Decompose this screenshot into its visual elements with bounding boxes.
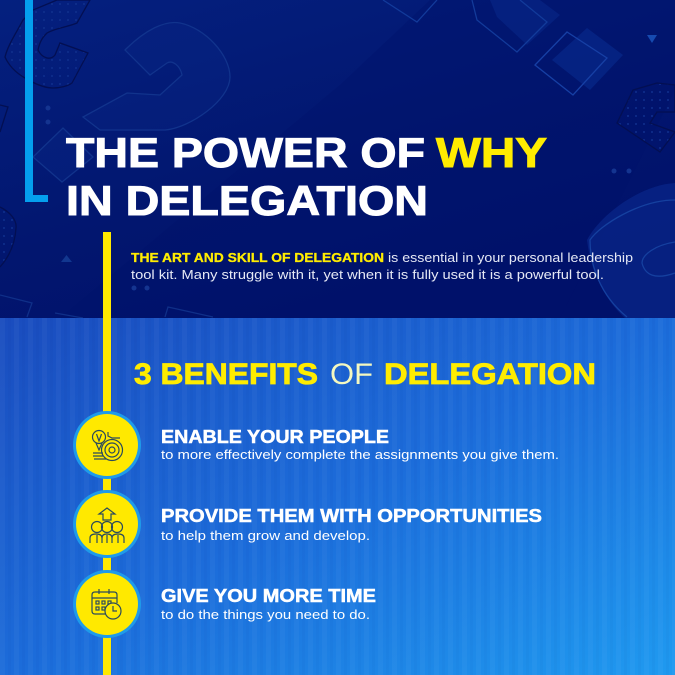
section heading: OF <box>330 358 373 391</box>
benefit 1 text <box>161 427 559 462</box>
section heading: 3 BENEFITS <box>134 358 318 391</box>
section heading <box>134 358 596 391</box>
intro text: tool kit. Many struggle with it, yet when it is fully used it is a powerful tool. <box>131 267 604 282</box>
intro text: is essential in your personal leadership <box>388 250 633 265</box>
benefit 2 text: PROVIDE THEM WITH OPPORTUNITIES <box>161 506 542 526</box>
title: IN DELEGATION <box>66 177 428 224</box>
panel: bright blue benefits background <box>0 318 675 675</box>
panel: dark header background <box>0 0 675 318</box>
benefit 3 text: GIVE YOU MORE TIME <box>161 586 376 606</box>
title: WHY <box>436 129 547 176</box>
accent: yellow timeline line <box>103 232 111 675</box>
icon: lightbulb and target <box>73 411 141 479</box>
title <box>66 129 547 224</box>
benefit 2 text: to help them grow and develop. <box>161 528 370 543</box>
benefit 1 text: to more effectively complete the assignments you give them. <box>161 447 559 462</box>
benefit 1 text: ENABLE YOUR PEOPLE <box>161 427 389 447</box>
benefit 1 <box>73 411 559 479</box>
icon: calendar and clock <box>73 570 141 638</box>
intro text <box>131 250 633 282</box>
title: THE POWER OF <box>66 129 425 176</box>
intro text: THE ART AND SKILL OF DELEGATION <box>131 250 384 265</box>
section heading: DELEGATION <box>384 358 596 391</box>
benefit 3 text <box>161 586 376 622</box>
benefit 2 <box>73 490 542 558</box>
benefit 2 text <box>161 506 542 543</box>
accent: light blue L bar <box>25 0 48 202</box>
icon: team with arrows <box>73 490 141 558</box>
benefit 3 text: to do the things you need to do. <box>161 607 370 622</box>
benefit 3 <box>73 570 376 638</box>
